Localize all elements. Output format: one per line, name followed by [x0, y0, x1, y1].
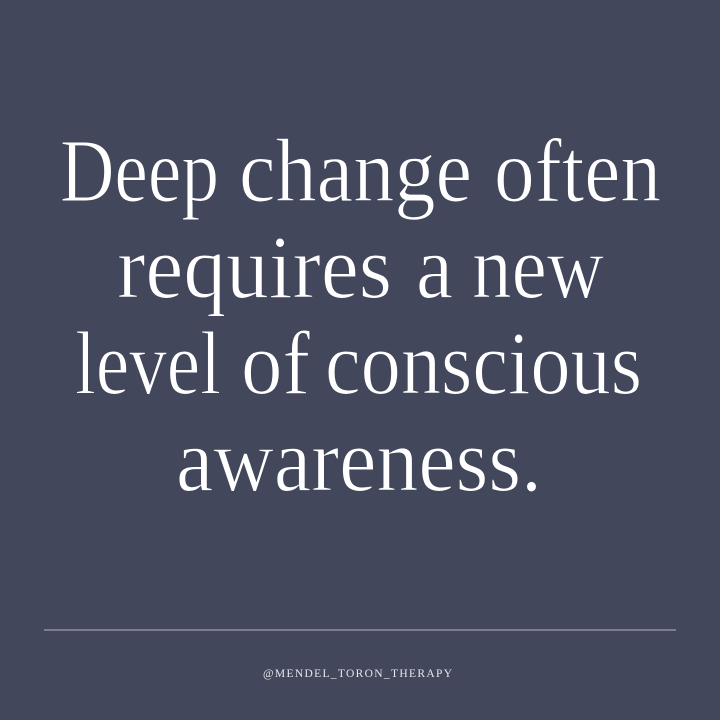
quote heading: requires [117, 218, 392, 318]
divider line [44, 630, 676, 631]
quote heading: often [494, 122, 661, 221]
quote heading: level [75, 314, 221, 414]
quote heading: a [416, 218, 453, 318]
quote heading: awareness. [176, 412, 542, 510]
quote heading: conscious [325, 314, 642, 414]
quote heading: change [239, 122, 472, 221]
quote heading: Deep [60, 122, 219, 221]
quote heading: new [472, 218, 604, 318]
quote heading [60, 122, 661, 510]
quote heading: of [241, 314, 310, 414]
social handle: @MENDEL_TORON_THERAPY [263, 668, 453, 680]
